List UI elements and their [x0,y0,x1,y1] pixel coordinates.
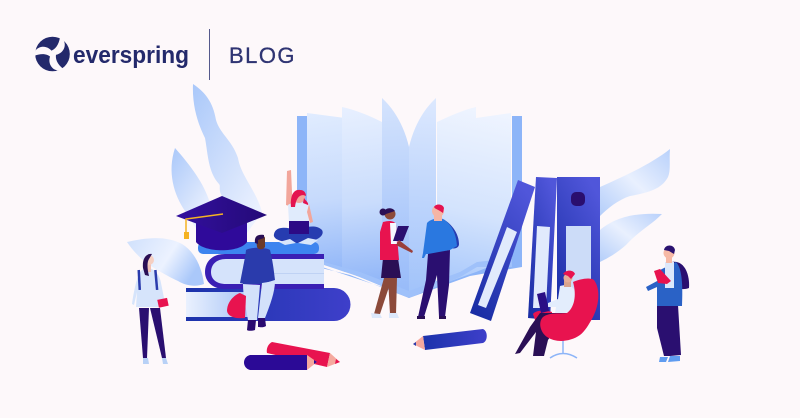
backpack [672,262,689,289]
bottom book [186,288,350,321]
book stack [186,242,350,321]
icon: red backpack [227,293,246,318]
heading: BLOG: BLOG [229,43,294,68]
leg [515,313,567,356]
pages right [409,98,436,298]
middle book [205,254,324,289]
backpack [443,219,459,248]
cap top [176,196,267,233]
feather: tall left [193,84,262,250]
pages left [307,113,345,272]
red pencil [267,342,340,367]
person: man with blue sweater [417,204,459,319]
feather: short left [172,148,210,230]
person: woman on books with laptop [274,170,323,245]
wordmark: everspring [73,42,189,69]
lower cover strip [324,258,512,298]
tassel [186,214,223,235]
chair legs [550,338,577,358]
logo: everspring [32,37,189,73]
binder 1 [470,180,535,321]
top book [198,242,319,254]
chair back rest [533,311,552,322]
binders [470,177,600,321]
cap base [196,222,247,250]
jacket [646,262,682,306]
binder 2 [528,177,557,320]
divider [209,29,210,80]
blue pencil [413,329,487,350]
binder 3 [557,177,600,320]
feather: right upper [600,149,670,216]
graduation cap [176,196,267,250]
book cover [297,116,522,298]
person: woman with tablet [371,208,413,318]
red chair [540,279,598,341]
feather: low left [127,238,204,286]
pencils [244,329,487,370]
dark blue pencil [244,355,317,370]
person: man with clipboard and backpack [646,246,689,362]
person: woman with backpack and red book [132,254,169,364]
open book [297,98,522,298]
trousers [657,305,681,356]
icon: everspring swirl mark [32,37,70,73]
person: woman in red chair with laptop [515,271,598,358]
feather: right lower [600,214,662,262]
torso [548,285,576,313]
person: man seated on books [240,235,275,331]
